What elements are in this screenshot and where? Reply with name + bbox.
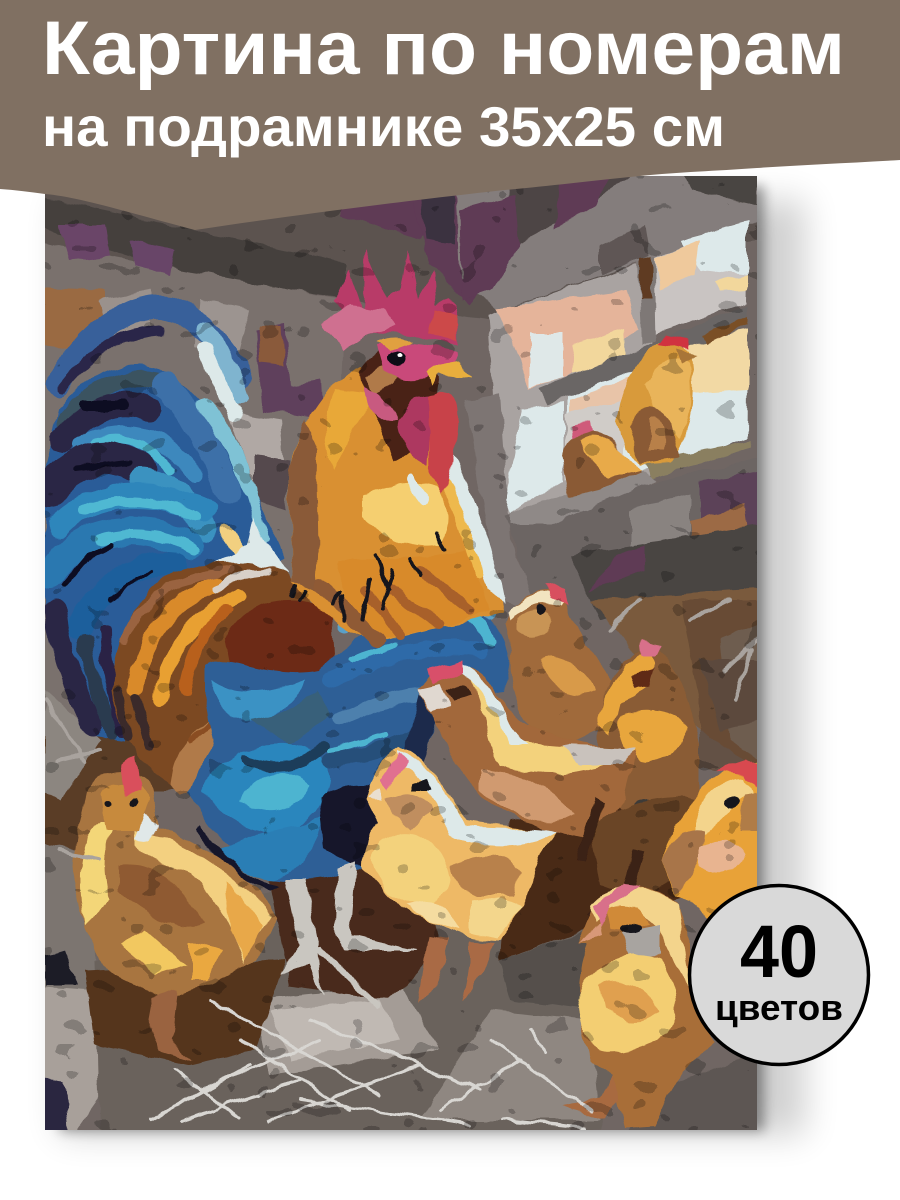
- middle large chick: [418, 660, 700, 920]
- subtitle: на подрамнике 35х25 см: [42, 95, 725, 158]
- rooster comb: [322, 248, 458, 350]
- rooster wing in brown and orange: [112, 562, 335, 795]
- title: Картина по номерам: [42, 6, 845, 91]
- paint-by-number mottling: [45, 176, 757, 1130]
- painting: rooster and chicks in a barn: [45, 176, 757, 1130]
- hens on window sill: [562, 335, 698, 497]
- rooster wattle: [398, 393, 458, 495]
- badge: 40 colours: [690, 886, 868, 1064]
- rooster head: [358, 338, 472, 460]
- badge: 40 colours: цветов: [715, 987, 843, 1028]
- bottom right chick: [563, 883, 715, 1130]
- rooster blue breast and body: [188, 598, 510, 890]
- barn background: [45, 176, 757, 1130]
- header banner: [0, 0, 900, 230]
- back chick: [506, 582, 612, 748]
- center chick: [362, 747, 557, 1003]
- rooster tail feathers: [45, 307, 285, 740]
- right chick cut by edge: [662, 760, 757, 919]
- rooster legs: [280, 862, 415, 1005]
- far right chick: [597, 640, 700, 830]
- canvas drop shadow: [60, 186, 805, 1135]
- rooster neck hackle: [288, 366, 504, 642]
- left chick: [73, 755, 278, 1060]
- straw on the floor: [45, 600, 757, 1128]
- window with light: [497, 222, 752, 525]
- badge: 40 colours: 40: [740, 910, 818, 993]
